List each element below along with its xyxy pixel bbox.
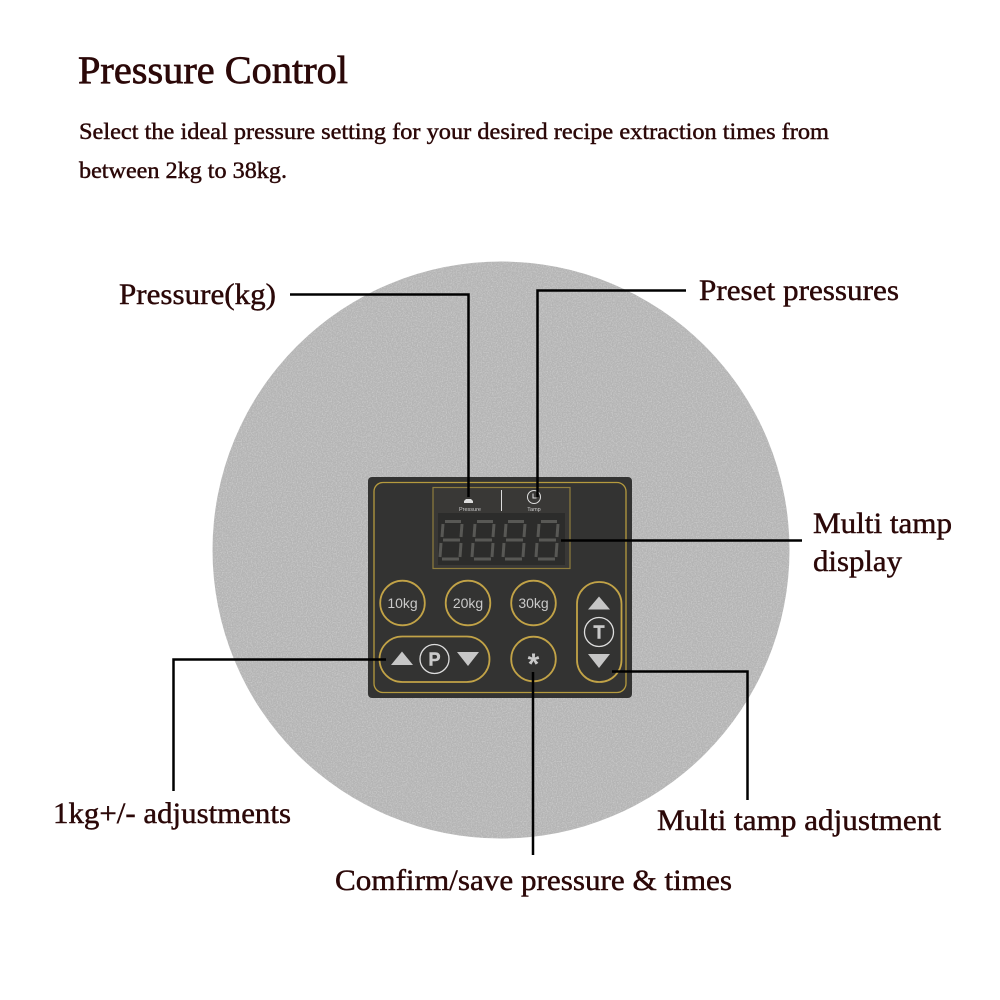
callout: confirm save: Comfirm/save pressure & times xyxy=(335,864,732,897)
callout: multi tamp display: Multi tamp xyxy=(813,507,952,540)
callout: preset pressures: Preset pressures xyxy=(699,274,899,307)
preset button 20kg: 20kg xyxy=(453,595,483,611)
preset button 10kg xyxy=(380,581,425,625)
callout: pressure xyxy=(119,278,468,497)
preset button 20kg xyxy=(446,581,490,625)
confirm button: * xyxy=(528,648,540,681)
pressure indicator: Pressure xyxy=(459,507,481,513)
silver disc xyxy=(212,262,790,838)
callout: multi tamp adjustment xyxy=(612,672,942,837)
preset button 30kg: 30kg xyxy=(518,595,549,611)
control panel xyxy=(368,477,632,698)
callout: pressure: Pressure(kg) xyxy=(119,278,276,311)
confirm button xyxy=(511,637,556,681)
intro text: Select the ideal pressure setting for your desired recipe extraction times from xyxy=(79,119,829,144)
callout: multi tamp display xyxy=(561,507,952,578)
callout: 1kg adjustments xyxy=(53,660,386,830)
display frame xyxy=(433,488,570,568)
intro text: between 2kg to 38kg. xyxy=(79,158,287,183)
preset button 30kg xyxy=(511,581,556,625)
intro text xyxy=(79,119,829,183)
tamp adjust button: T xyxy=(594,622,604,642)
tamp adjust button xyxy=(577,582,622,682)
callout: preset pressures xyxy=(538,274,899,497)
preset button 10kg: 10kg xyxy=(387,595,418,611)
pressure adjust button xyxy=(380,636,490,682)
callout: multi tamp display: display xyxy=(813,545,902,578)
seven segment display xyxy=(440,522,558,559)
panel gold border xyxy=(374,482,626,692)
title: Pressure Control xyxy=(78,49,348,92)
pressure adjust button: P xyxy=(428,650,441,670)
callout: 1kg adjustments: 1kg+/- adjustments xyxy=(53,797,291,830)
callout: multi tamp adjustment: Multi tamp adjustment xyxy=(657,804,942,837)
tamp indicator: Tamp xyxy=(527,507,541,513)
